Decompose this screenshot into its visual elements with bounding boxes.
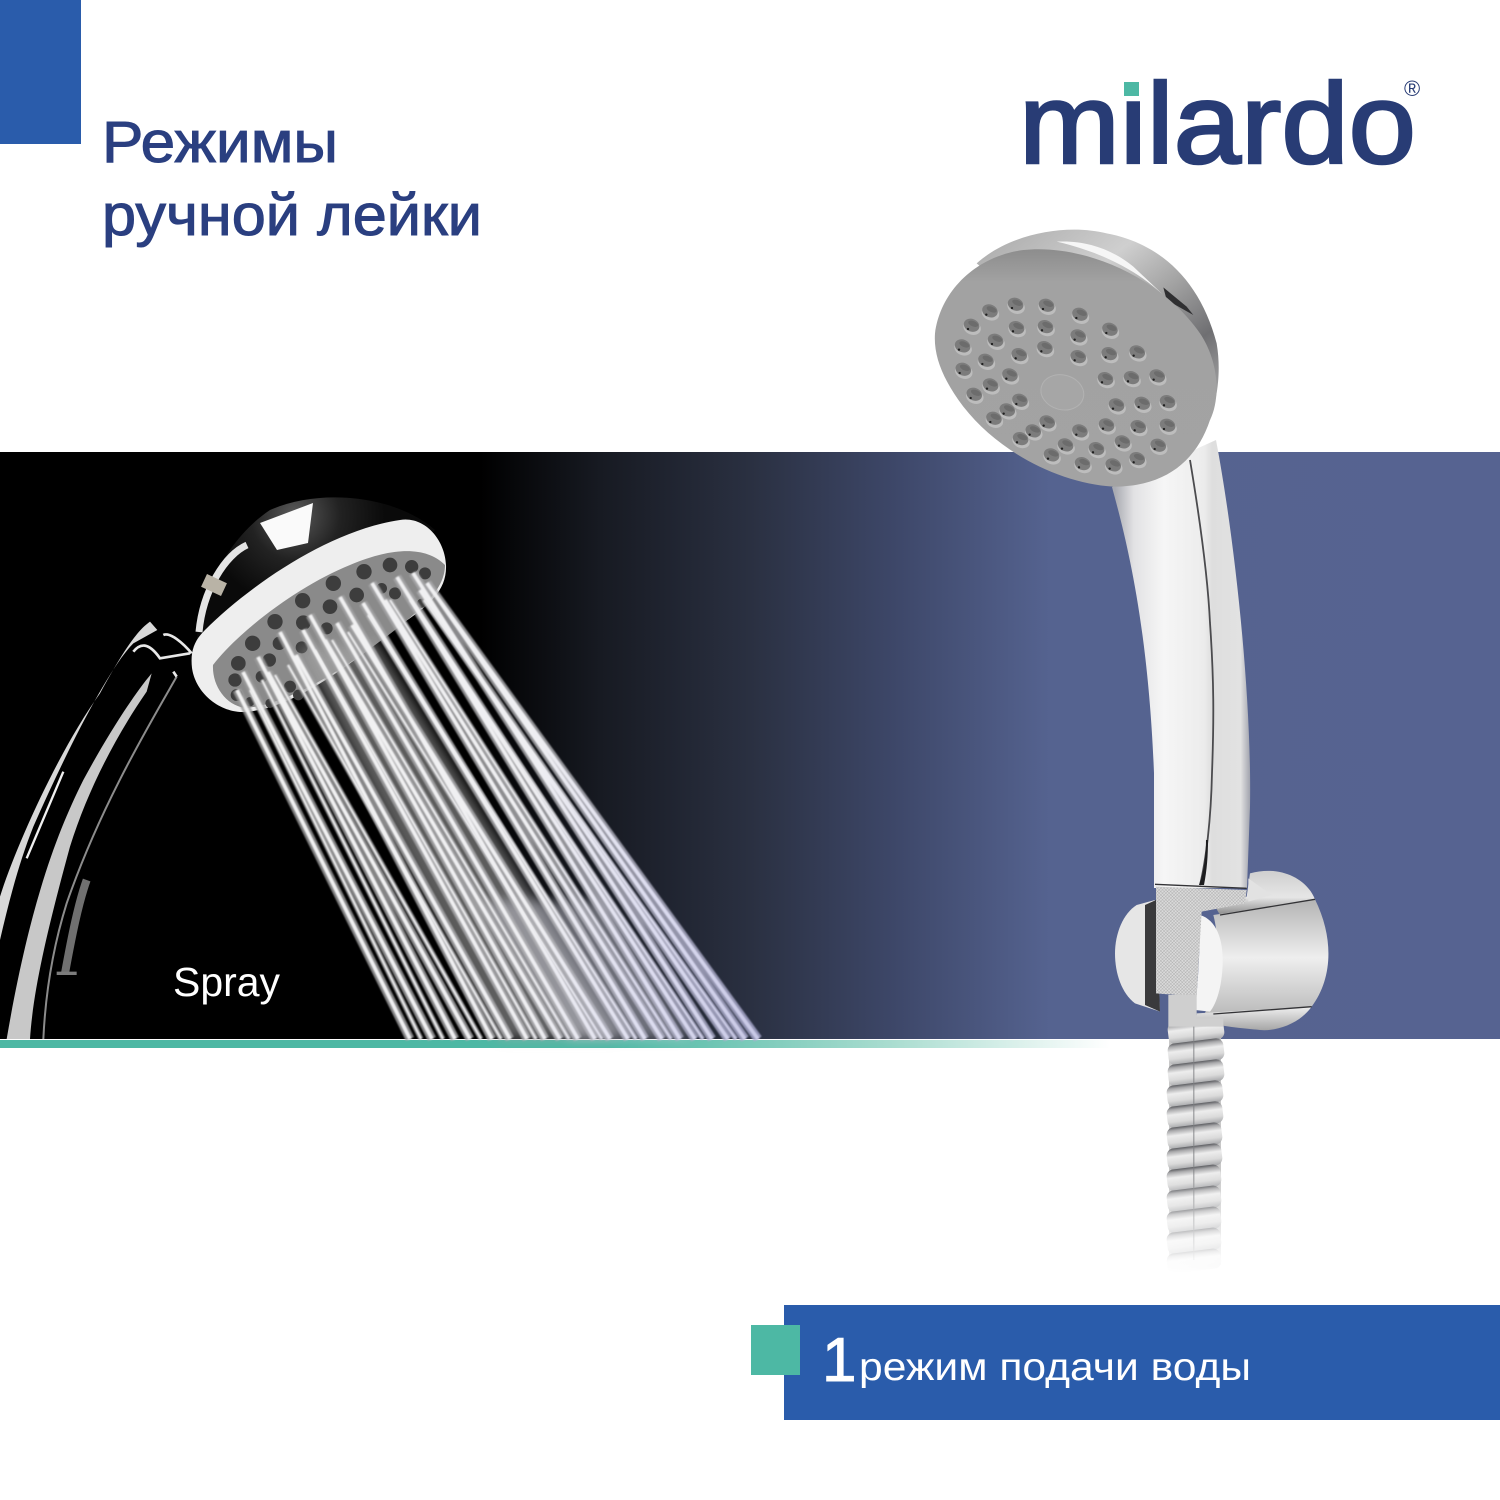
main grey reflection [7,673,152,1039]
bracket front cap [1195,915,1223,1012]
teal accent square [751,1325,800,1375]
mode callout bar [784,1305,1500,1420]
title: ручной лейки [102,183,482,248]
white rim [192,520,446,712]
neck connector [133,634,192,677]
outer chrome edge [0,622,157,940]
centre disc [1037,370,1088,415]
brand logo: milardo: ® [1404,76,1420,101]
dark-to-blue photo band [0,452,1500,1039]
product: metal hose [1160,1015,1230,1275]
grey spray face [935,249,1217,487]
knurled collar [1156,887,1247,997]
grey face [213,551,445,708]
photo: water streams [237,573,758,1039]
title: Режимы [102,110,338,175]
mode count text [822,1326,1251,1395]
photo: spraying shower head [192,497,446,712]
corner blue block [0,0,81,144]
mode count text: 1 [822,1326,856,1395]
spray nozzles [952,295,1179,477]
bracket front face [1203,899,1328,1017]
inner white line [27,772,63,858]
bracket top cap [1213,871,1315,915]
bracket lower cap [1197,1007,1312,1030]
photo: shower handle curve [0,622,192,1039]
product: shower head face [935,230,1219,487]
left knob [1115,900,1160,1012]
mode count text: режим подачи воды [859,1346,1251,1389]
product: wall bracket [1115,871,1328,1030]
hose nipple [1168,995,1223,1027]
brand logo: milardo: milardo [1019,61,1416,188]
product: hand shower handle [1112,440,1250,888]
chrome back dome [977,230,1219,420]
title [102,110,482,248]
teal gradient rule [0,1040,1110,1048]
shower head nozzles [228,558,431,708]
photo caption: Spray: Spray [173,959,280,1005]
chrome dome [197,497,435,650]
